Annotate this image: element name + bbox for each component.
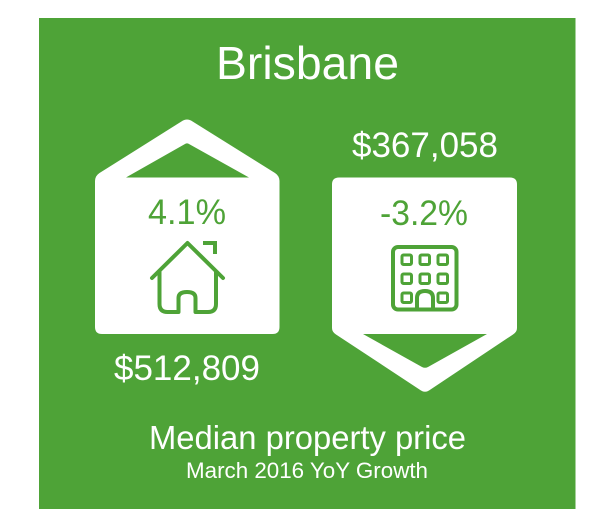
panel: unit price card [332, 178, 517, 392]
icon: apartment building [393, 247, 456, 310]
unit price: $367,058 [352, 126, 498, 165]
caption: date and growth basis: March 2016 YoY Growth [186, 458, 428, 483]
house price: $512,809 [114, 349, 260, 388]
icon: house [152, 243, 223, 312]
downward triangle [363, 334, 487, 368]
caption: median property price: Median property price [149, 419, 466, 456]
house-shaped card [95, 120, 280, 334]
roof triangle [126, 143, 249, 178]
house growth value: 4.1% [148, 193, 226, 232]
downward arrow card [332, 178, 517, 392]
panel: house price card [95, 120, 280, 334]
title: Brisbane [216, 37, 399, 89]
unit growth value: -3.2% [380, 194, 468, 233]
